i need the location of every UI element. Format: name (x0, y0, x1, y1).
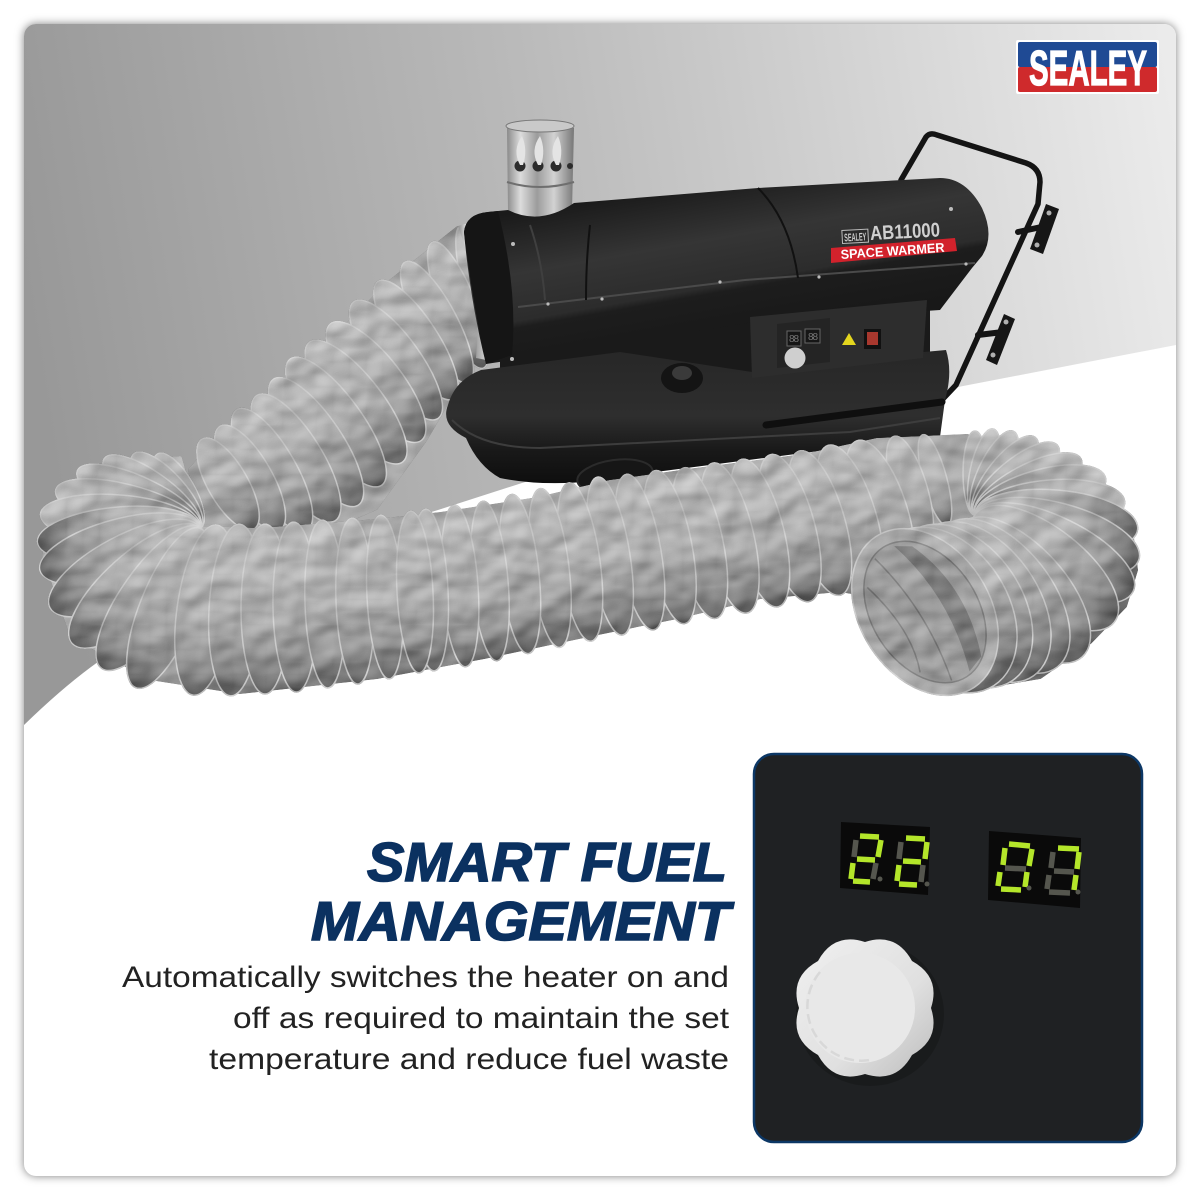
body text: Automatically switches the heater on and (122, 961, 729, 994)
rivets (510, 207, 968, 361)
grey gradient background with curved white edge (24, 24, 1176, 725)
headline: MANAGEMENT (311, 890, 735, 952)
SEALEY model badge: AB11000 (870, 219, 941, 245)
main duct hose with bend and open end (32, 425, 1149, 723)
fuel tank base (446, 350, 949, 483)
headline: SMART FUEL (367, 831, 727, 893)
drum end ring (464, 211, 513, 364)
metal collar at heater outlet (458, 220, 497, 362)
heater drum (464, 178, 988, 364)
display: left 22 (840, 822, 930, 895)
body text: off as required to maintain the set (233, 1002, 730, 1035)
upper duct hose section (185, 223, 509, 543)
right bend ribs (843, 425, 1149, 720)
open hose end (821, 501, 1029, 723)
lower rail (766, 402, 942, 425)
display: right 07 (988, 831, 1081, 908)
SEALEY model badge (842, 219, 941, 246)
wheel (575, 455, 655, 497)
left bend ribs (32, 442, 437, 699)
control panel: 88 (808, 332, 818, 343)
fuel cap (661, 363, 703, 393)
body text: temperature and reduce fuel waste (209, 1043, 729, 1076)
handle frame (766, 134, 1046, 425)
control panel: 88 (789, 334, 799, 345)
headline (311, 831, 735, 952)
hose body backing (44, 436, 1136, 692)
SEALEY logo (1016, 40, 1159, 96)
SEALEY model badge: SEALEY (844, 231, 867, 244)
body text (122, 961, 730, 1076)
tank rim line (452, 418, 940, 448)
control panel (750, 300, 927, 378)
space heater (446, 120, 1059, 497)
fill between drum and tank (500, 300, 930, 390)
inset panel: control close-up (754, 754, 1142, 1142)
straight run ribs (408, 431, 959, 672)
drum seams (518, 188, 975, 307)
chimney flue (506, 120, 574, 224)
red SPACE WARMER label: SPACE WARMER (840, 240, 946, 262)
rotary knob (796, 939, 944, 1086)
hinge brackets (986, 204, 1059, 365)
